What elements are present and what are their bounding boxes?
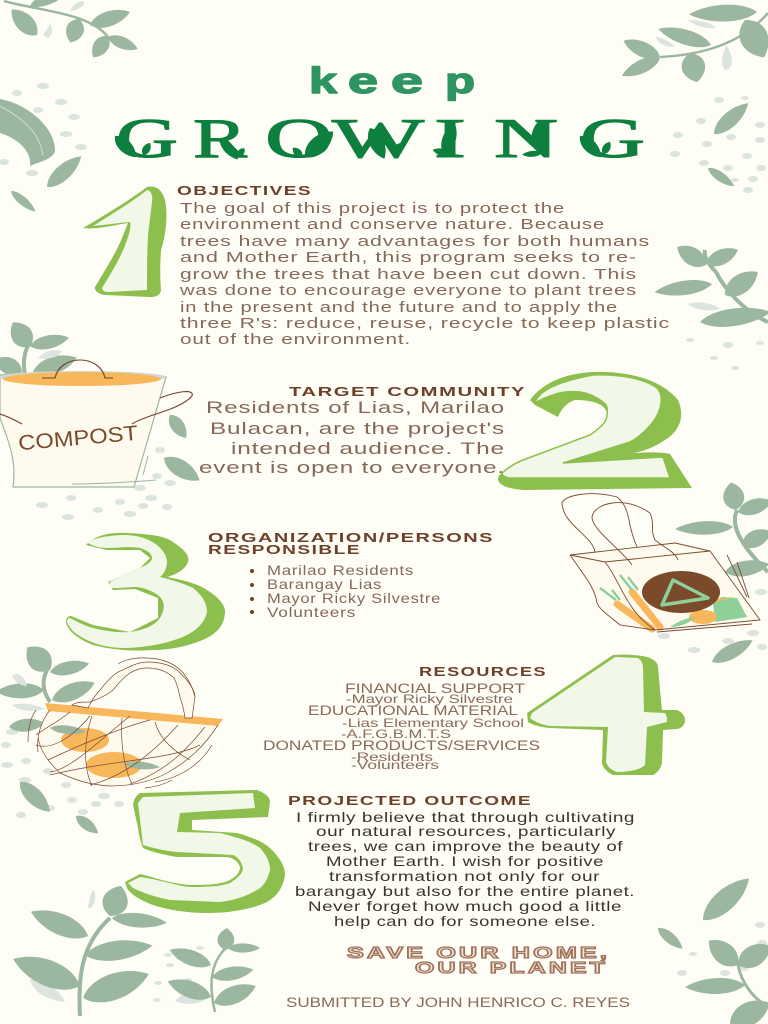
title: GROWING: G [116, 108, 178, 170]
text: projected outcome body: trees, we can improve the beauty of [308, 838, 623, 854]
text: projected outcome body: I firmly believe that through cultivating [296, 809, 635, 825]
bullet list: Mayor Ricky Silvestre [267, 590, 441, 606]
text: resources list: -A.F.G.B.M.T.S [341, 727, 451, 741]
slogan [347, 945, 610, 977]
leaves: beside bucket [160, 411, 204, 487]
icon: compost bucket: COMPOST [17, 422, 139, 455]
title: keep: k [309, 60, 338, 101]
icon: compost bucket [0, 360, 192, 487]
text: objectives body [179, 200, 670, 348]
heading: organization: RESPONSIBLE [208, 542, 361, 557]
heading: projected outcome: PROJECTED OUTCOME [288, 793, 532, 808]
text: submitted by: SUBMITTED BY JOHN HENRICO C. REYES [286, 995, 630, 1010]
plant: bottom-left small [165, 927, 260, 1012]
heading: objectives: OBJECTIVES [177, 183, 312, 198]
text: objectives body: environment and conserve nature. Because [180, 216, 605, 233]
plant: right of bag [675, 481, 768, 579]
leaves: small left [8, 151, 86, 215]
text: resources list: FINANCIAL SUPPORT [345, 681, 525, 696]
text: objectives body: grow the trees that have been cut down. This [180, 266, 637, 283]
title: keep: p [445, 60, 475, 101]
bullet list: Volunteers [267, 604, 356, 620]
leaf: below bag [709, 634, 756, 668]
text: projected outcome body: barangay but also for the entire planet. [295, 883, 635, 899]
text: target community body: Bulacan, are the project's [210, 419, 505, 438]
title: GROWING: O [265, 108, 333, 170]
bullet list: Barangay Lias [267, 576, 382, 592]
title: keep [309, 60, 475, 101]
text: resources list: -Residents [351, 750, 433, 764]
text: resources list: -Volunteers [351, 758, 439, 772]
title: GROWING: W [332, 108, 424, 170]
title: GROWING: R [193, 108, 248, 170]
plant: top-right branch [619, 4, 768, 85]
number 4 [527, 655, 685, 775]
heading: organization: ORGANIZATION/PERSONS [208, 530, 494, 545]
slogan: SAVE OUR HOME, [347, 945, 610, 962]
bullet list: Marilao Residents [267, 562, 414, 578]
slogan: OUR PLANET [415, 960, 608, 977]
plant: bottom-left large [8, 882, 167, 1016]
text: target community body: event is open to everyone. [199, 458, 505, 477]
icon: tote bag [562, 494, 760, 632]
title: GROWING: I [434, 108, 466, 170]
text: resources list: DONATED PRODUCTS/SERVICES [263, 738, 540, 753]
text: objectives body: out of the environment. [180, 331, 411, 348]
text: objectives body: was done to encourage everyone to plant trees [179, 282, 637, 299]
title: keep: e [348, 60, 378, 101]
number 1 [83, 187, 166, 297]
text: target community body [199, 398, 505, 477]
text: objectives body: three R's: reduce, reuse, recycle to keep plastic [180, 315, 670, 332]
text: projected outcome body [295, 809, 635, 929]
leaves: small right [705, 98, 753, 190]
bullet list [250, 562, 441, 620]
plant: behind compost bucket [0, 316, 79, 380]
text: objectives body: The goal of this project is to protect the [180, 200, 565, 217]
plant: right middle [654, 240, 768, 331]
number 3 [66, 533, 225, 651]
title: GROWING: N [494, 108, 558, 170]
text: projected outcome body: Mother Earth. I wish for positive [326, 853, 604, 869]
text: target community body: intended audience. The [231, 439, 505, 458]
text: projected outcome body: transformation not only for our [329, 868, 600, 884]
leaves: below basket [14, 776, 101, 838]
heading: resources: RESOURCES [419, 664, 547, 679]
plant: bottom-right [655, 871, 768, 1024]
number 5 [125, 790, 285, 913]
text: resources list: -Mayor Ricky Silvestre [346, 692, 513, 706]
plant: top-left branch [4, 0, 140, 62]
heading: target community: TARGET COMMUNITY [289, 384, 526, 399]
text: resources list: -Lias Elementary School [342, 716, 524, 730]
text: target community body: Residents of Lias, Marilao [206, 398, 505, 417]
text: projected outcome body: our natural resources, particularly [316, 823, 616, 839]
heading: organization [208, 530, 494, 557]
title: GROWING [111, 108, 645, 170]
title: keep: e [391, 60, 423, 101]
text: projected outcome body: Never forget how much good a little [308, 898, 622, 914]
text: projected outcome body: help can do for someone else. [334, 913, 596, 929]
text: resources list [263, 681, 540, 772]
text: resources list: EDUCATIONAL MATERIAL [308, 703, 519, 718]
number 2 [498, 372, 692, 490]
text: objectives body: trees have many advantages for both humans [180, 233, 650, 250]
title: GROWING: G [580, 108, 645, 170]
plant: behind basket [0, 639, 98, 733]
leaf: large left [0, 99, 55, 166]
text: objectives body: in the present and the future and to apply the [180, 299, 618, 316]
icon: net basket with oranges [28, 658, 223, 788]
text: objectives body: and Mother Earth, this program seeks to re- [180, 249, 637, 266]
